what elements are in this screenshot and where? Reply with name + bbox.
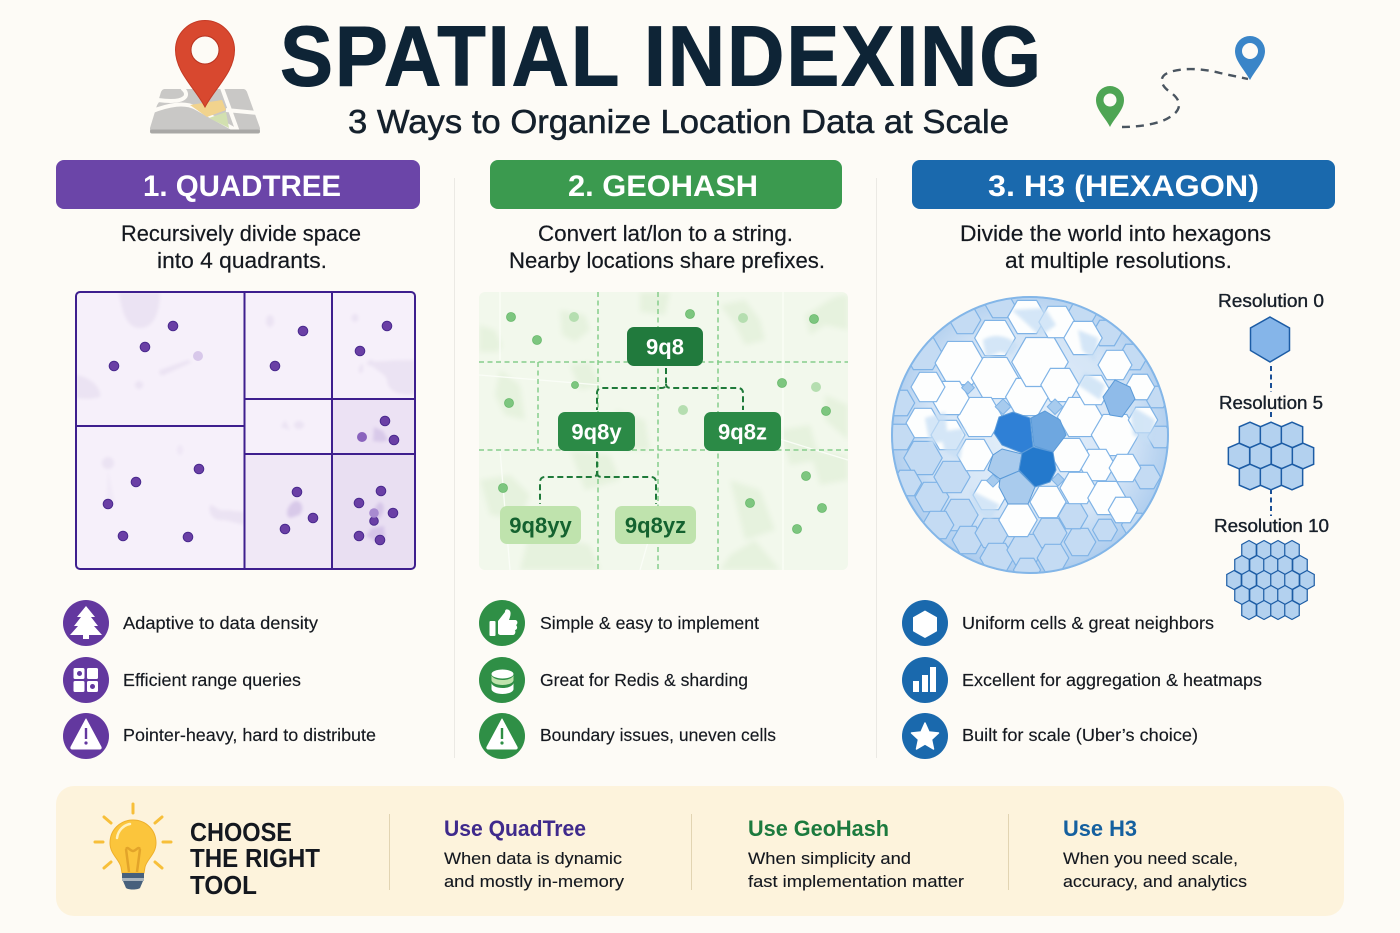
heading: quadtree: 1. QUADTREE (143, 170, 341, 203)
icon: route between two pins (1096, 36, 1265, 127)
heading: choose the right tool (190, 819, 320, 900)
node: 9q8yz: 9q8yz (625, 513, 686, 538)
node: 9q8z (704, 412, 781, 451)
node: 9q8: 9q8 (646, 334, 684, 360)
text: uniform: Uniform cells & great neighbors (962, 613, 1214, 633)
hex cluster: resolution 5 (1228, 422, 1314, 490)
panel: geohash (479, 160, 848, 759)
pros and cons: geohash (479, 600, 776, 759)
icon: tree (63, 600, 109, 646)
recommendation: h3: Use H3 (1063, 816, 1137, 841)
icon: grid (63, 657, 109, 703)
chart: quadtree cells and points (76, 292, 415, 569)
node: 9q8yz (615, 506, 696, 544)
node: 9q8yy (500, 506, 581, 544)
description: h3: Divide the world into hexagons (960, 221, 1271, 246)
icon: hexagon (902, 600, 948, 646)
text: range queries: Efficient range queries (123, 670, 301, 690)
recommendation: geohash: When simplicity and (748, 849, 911, 868)
recommendation: quadtree: and mostly in-memory (444, 872, 625, 891)
recommendation: h3 (1063, 816, 1247, 891)
recommendation: geohash (748, 816, 964, 891)
recommendation: geohash: Use GeoHash (748, 816, 889, 841)
description: quadtree (121, 221, 361, 273)
chart: geohash map and prefix tree (479, 292, 848, 570)
icon: star (902, 713, 948, 759)
node: 9q8y (558, 412, 635, 451)
panel: h3 (885, 160, 1335, 759)
node: 9q8yy: 9q8yy (509, 513, 572, 538)
hex cluster: resolution 10 (1227, 540, 1314, 620)
icon: bars (902, 657, 948, 703)
title: SPATIAL INDEXING (280, 10, 1043, 104)
icon: warning (63, 713, 109, 759)
hex: resolution 0 (1250, 317, 1290, 362)
recommendation: geohash: fast implementation matter (748, 872, 964, 891)
label: resolution 5: Resolution 5 (1219, 393, 1323, 413)
panel: quadtree (56, 160, 420, 759)
resolution ladder (1214, 291, 1329, 620)
panel: choose the right tool (56, 786, 1344, 916)
pros and cons: quadtree (63, 600, 376, 759)
heading: h3: 3. H3 (HEXAGON) (988, 170, 1259, 203)
icon: database (479, 657, 525, 703)
node: 9q8y: 9q8y (571, 420, 622, 444)
subtitle: 3 Ways to Organize Location Data at Scale (348, 103, 1009, 140)
description: quadtree: Recursively divide space (121, 221, 361, 246)
text: adaptive: Adaptive to data density (123, 613, 318, 633)
description: geohash: Nearby locations share prefixes. (509, 248, 825, 273)
recommendation: quadtree (444, 816, 625, 891)
label: resolution 10: Resolution 10 (1214, 516, 1329, 536)
text: simple: Simple & easy to implement (540, 613, 759, 633)
recommendation: h3: When you need scale, (1063, 849, 1238, 868)
description: geohash: Convert lat/lon to a string. (538, 221, 793, 246)
icon: light bulb (95, 804, 171, 890)
text: boundary: Boundary issues, uneven cells (540, 725, 776, 745)
text: redis: Great for Redis & sharding (540, 670, 748, 690)
text: uber: Built for scale (Uber’s choice) (962, 725, 1198, 745)
description: geohash (509, 221, 825, 273)
chart: hexagon globe (885, 292, 1172, 582)
description: quadtree: into 4 quadrants. (157, 248, 327, 273)
recommendation: quadtree: Use QuadTree (444, 816, 586, 841)
node: 9q8z: 9q8z (718, 420, 767, 444)
recommendation: h3: accuracy, and analytics (1063, 872, 1247, 891)
description: h3: at multiple resolutions. (1005, 248, 1232, 273)
heading: choose the right tool: TOOL (190, 872, 257, 900)
heading: choose the right tool: THE RIGHT (190, 845, 320, 873)
column divider (454, 178, 455, 758)
text: pointer-heavy: Pointer-heavy, hard to distribute (123, 725, 376, 745)
node: 9q8 (627, 327, 703, 366)
heading: geohash (490, 160, 842, 209)
icon: thumbs up (479, 600, 525, 646)
heading: geohash: 2. GEOHASH (568, 170, 758, 203)
text: aggregation: Excellent for aggregation & heatmaps (962, 670, 1262, 690)
icon: warning (479, 713, 525, 759)
heading: choose the right tool: CHOOSE (190, 819, 292, 847)
description: h3 (960, 221, 1271, 273)
recommendation: quadtree: When data is dynamic (444, 849, 623, 868)
label: resolution 0: Resolution 0 (1218, 291, 1324, 311)
icon: red location pin on map (150, 21, 260, 134)
heading: quadtree (56, 160, 420, 209)
pros and cons: h3 (902, 600, 1262, 759)
heading: h3 (912, 160, 1335, 209)
